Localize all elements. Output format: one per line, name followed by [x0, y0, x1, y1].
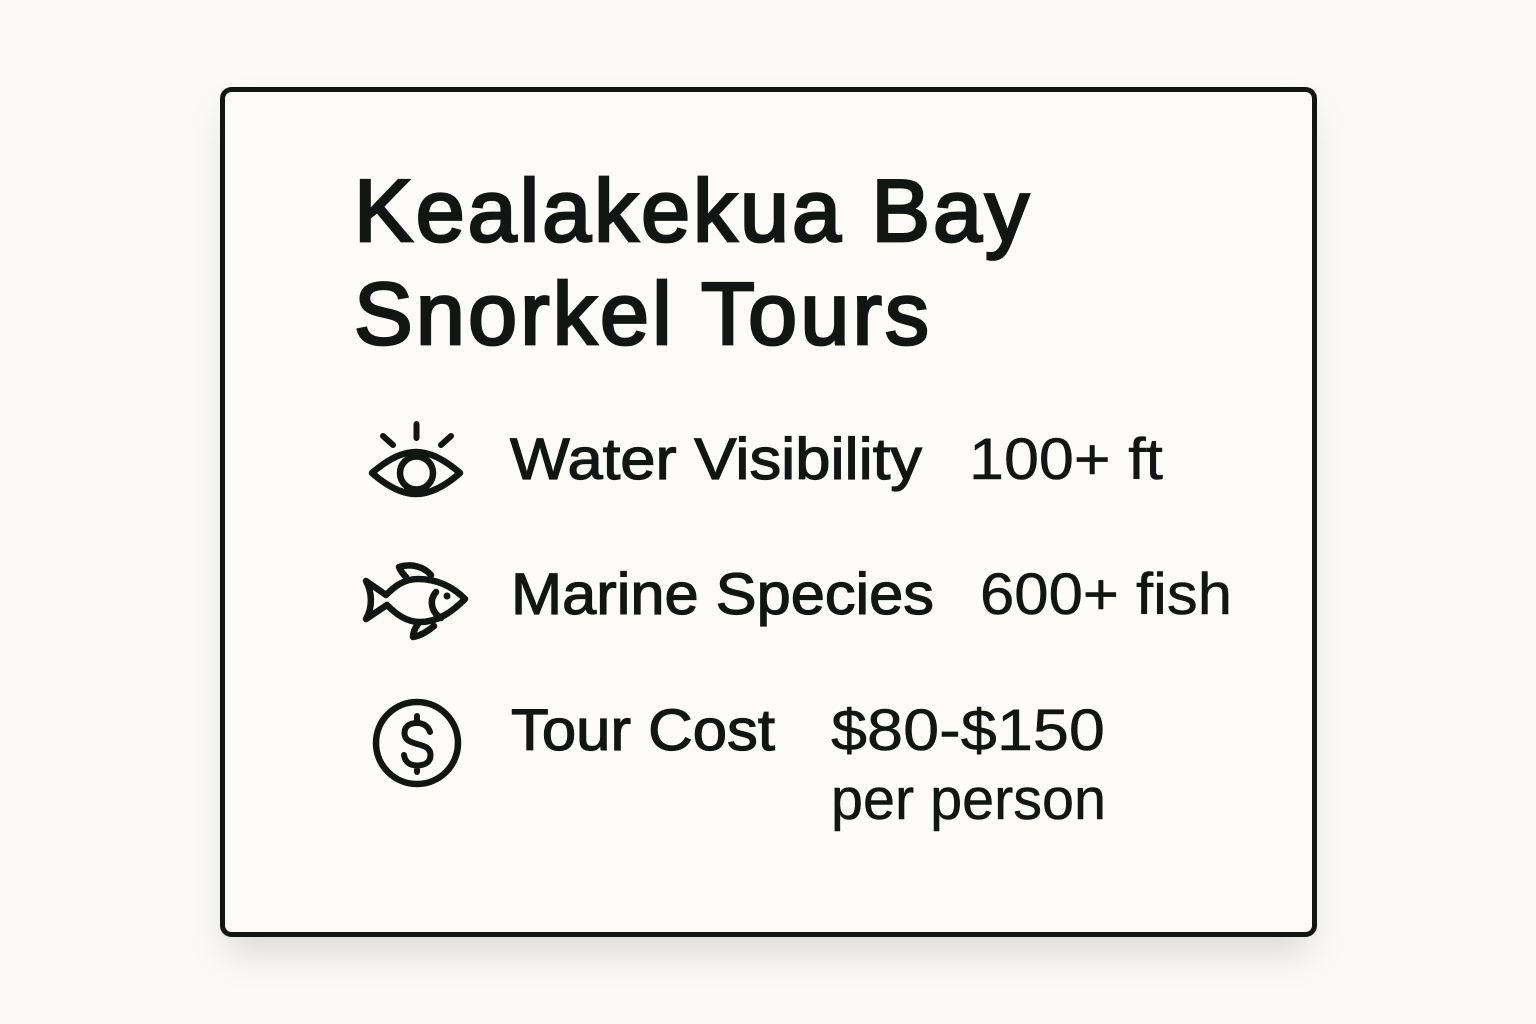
icon: fish	[366, 565, 465, 637]
text: tour cost	[511, 698, 1106, 832]
title: Kealakekua Bay	[354, 161, 1029, 260]
text: tour cost: per person	[831, 767, 1106, 832]
title	[354, 161, 1029, 363]
text: tour cost: $80-$150	[831, 698, 1105, 763]
text: marine species: 600+ fish	[980, 562, 1232, 627]
title: Snorkel Tours	[354, 264, 929, 363]
text: water visibility	[510, 427, 1163, 492]
icon: eye	[372, 424, 460, 495]
panel: card	[222, 90, 1314, 954]
text: water visibility: Water Visibility	[510, 427, 922, 492]
text: water visibility: 100+ ft	[969, 427, 1163, 492]
text: tour cost: Tour Cost	[511, 698, 775, 763]
text: marine species: Marine Species	[511, 562, 934, 627]
icon: dollar	[376, 702, 458, 784]
text: marine species	[511, 562, 1232, 627]
